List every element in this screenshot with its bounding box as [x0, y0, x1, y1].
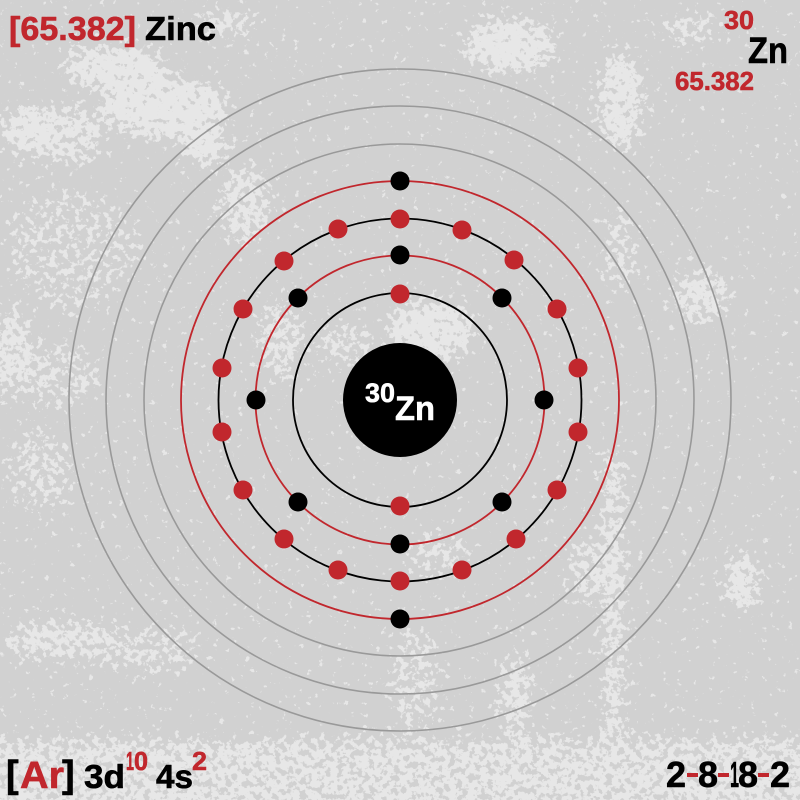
element symbol block: [675, 5, 788, 96]
electron configuration: [: [6, 754, 19, 796]
nucleus with symbol: 30: [365, 378, 395, 408]
nucleus with symbol: Zn: [395, 390, 435, 428]
title: atomic mass and name: [9, 10, 216, 47]
shell 3 with 18 electrons: [212, 210, 588, 590]
electron configuration: ]: [62, 754, 75, 796]
element symbol block: 65.382: [675, 66, 754, 96]
outer empty electron shells: [69, 69, 731, 731]
electron configuration: 2: [192, 746, 207, 776]
title: atomic mass and name: [65.382]: [9, 10, 136, 47]
electrons per shell: [666, 754, 790, 795]
electrons per shell: 2: [770, 754, 790, 795]
electron configuration: 3d: [84, 758, 125, 795]
element symbol block: Zn: [748, 30, 788, 71]
electrons per shell: 1: [730, 754, 739, 795]
electrons per shell: 8: [738, 754, 758, 795]
shell 1 with 2 electrons: [293, 284, 507, 516]
nucleus with symbol: [343, 343, 457, 457]
electron configuration: 1: [126, 746, 134, 776]
electrons per shell: 2: [666, 754, 686, 795]
electron configuration: Ar: [20, 755, 64, 797]
electrons per shell: 8: [698, 754, 718, 795]
electron configuration: 4s: [156, 758, 193, 795]
shell 4 with 2 electrons: [181, 172, 619, 628]
element symbol block: 30: [724, 5, 754, 35]
electron configuration: 0: [134, 746, 148, 776]
electron configuration: [6, 746, 207, 797]
shell 2 with 8 electrons: [246, 246, 554, 554]
title: atomic mass and name: Zinc: [145, 10, 216, 47]
